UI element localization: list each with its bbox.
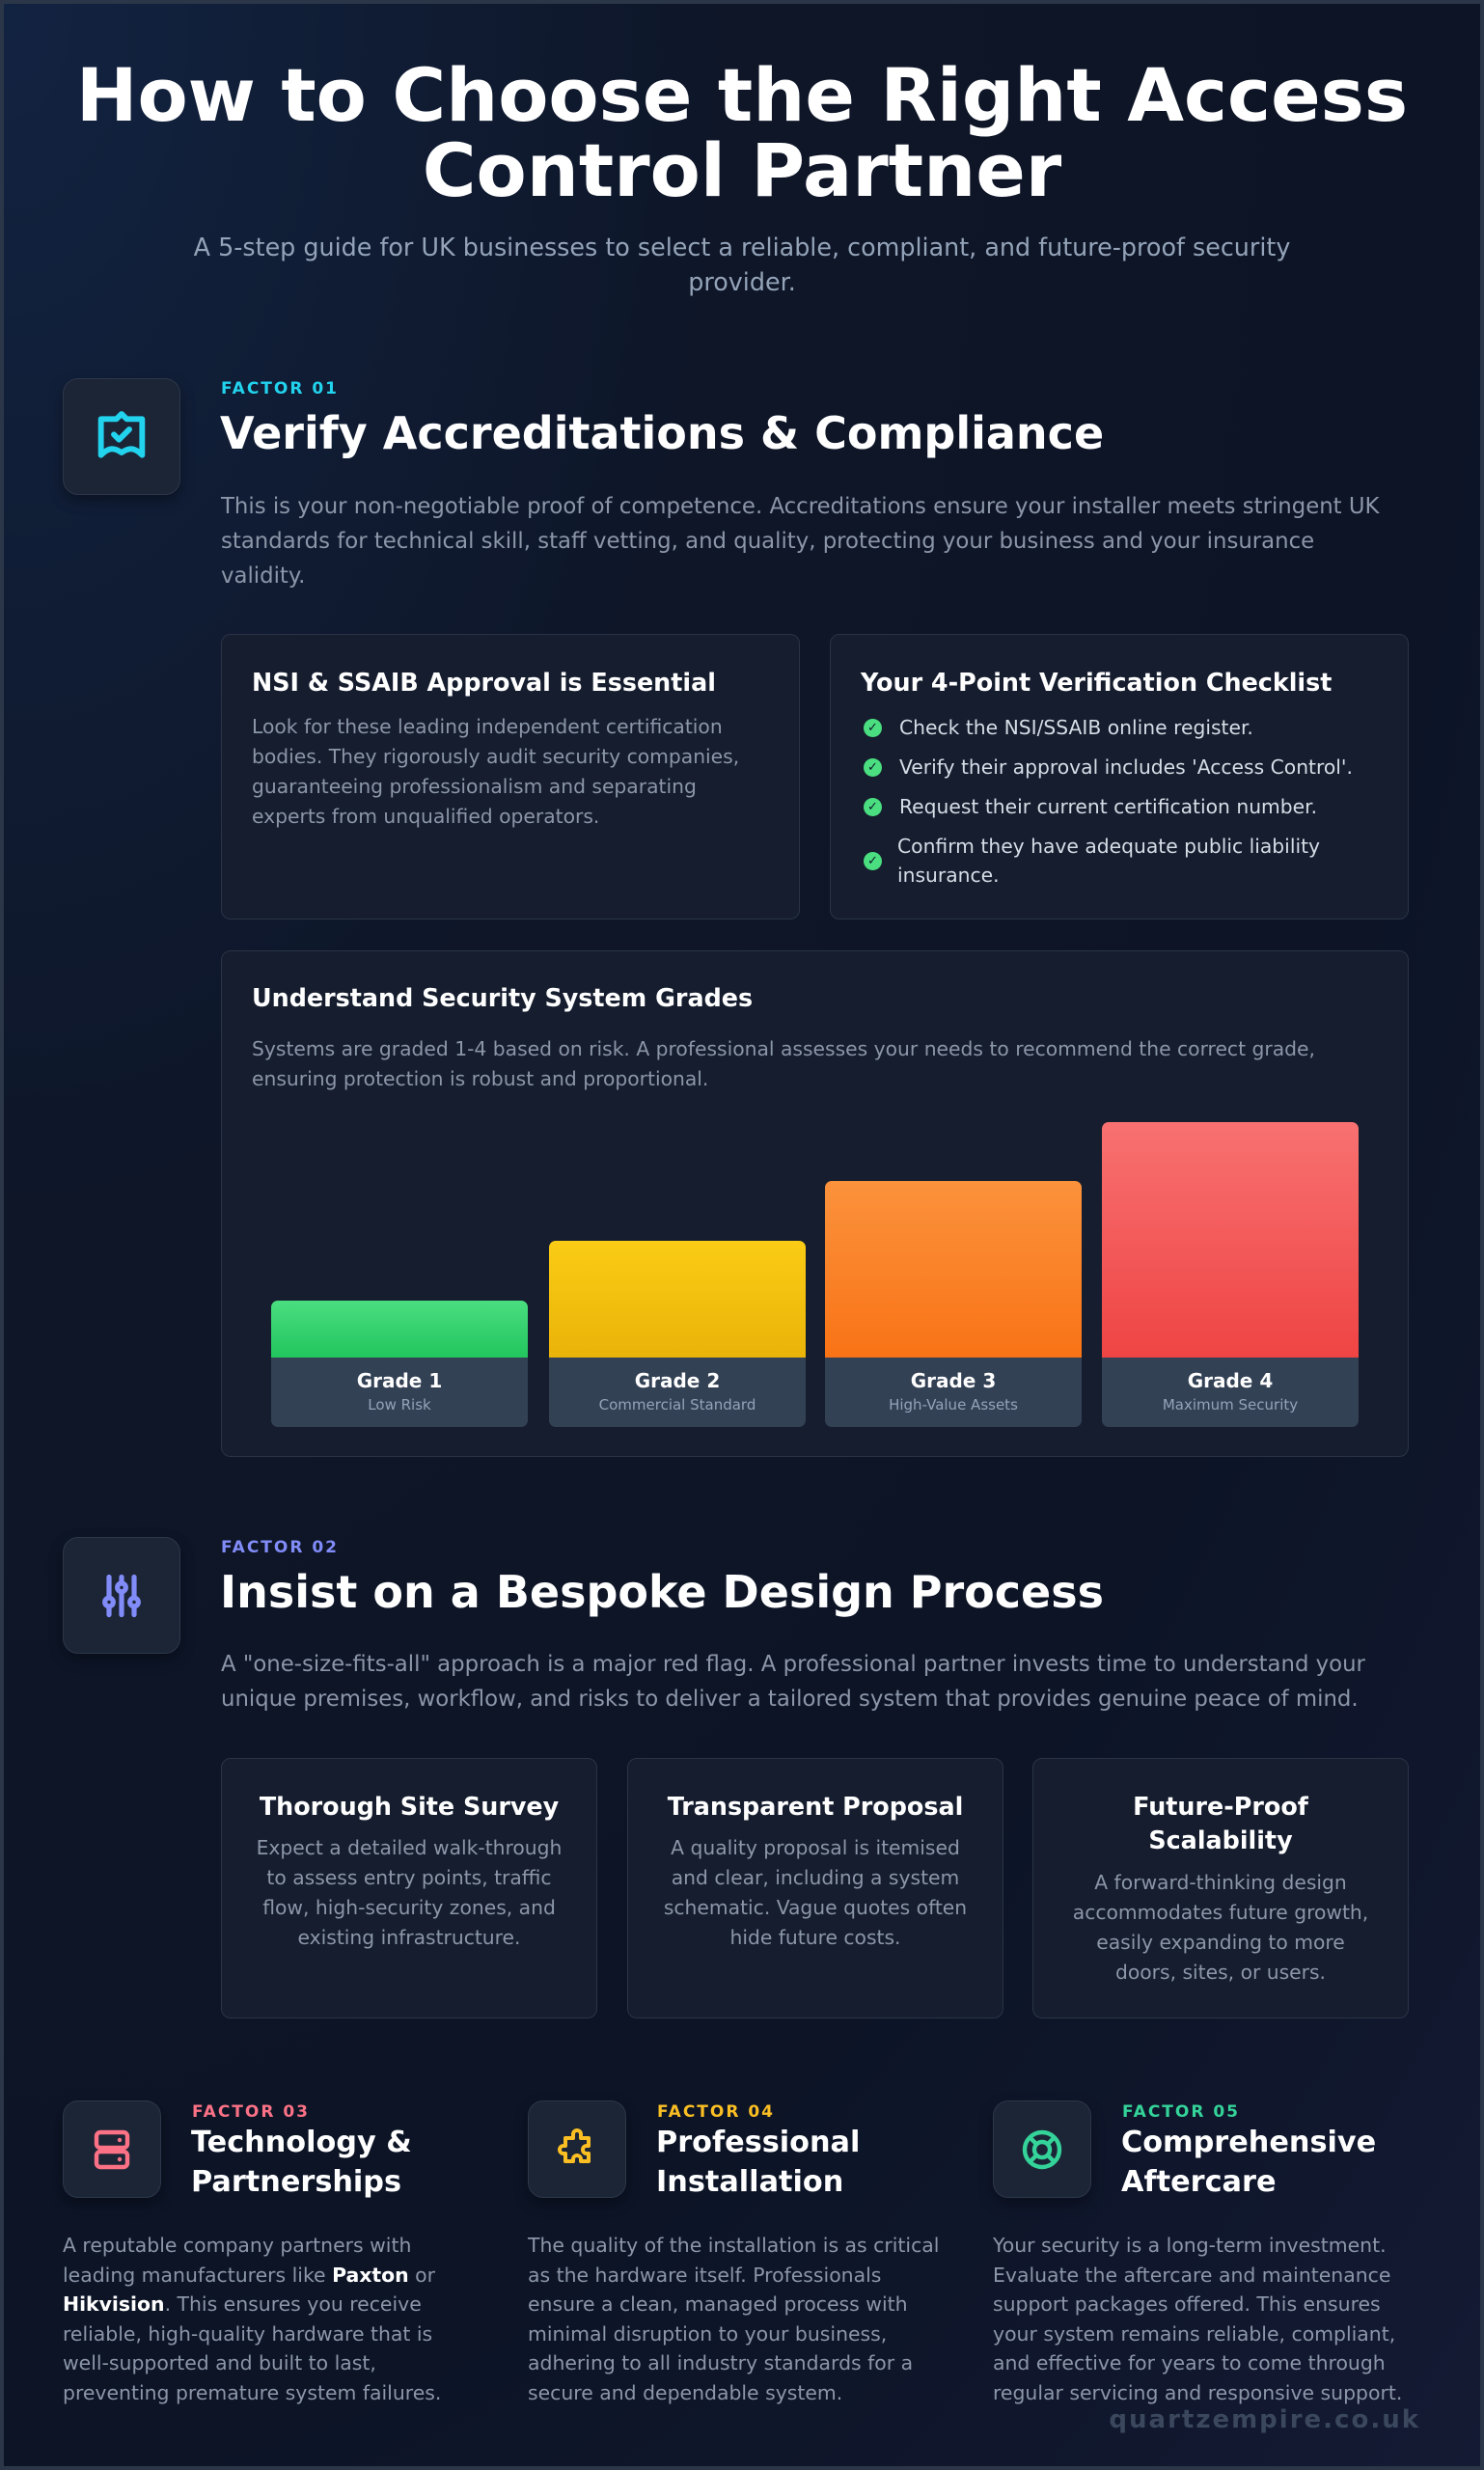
factor 05 block: Comprehensive	[1121, 2126, 1376, 2159]
factor 03 block: FACTOR 03	[192, 2102, 310, 2122]
card: site survey: Expect a detailed walk-through	[257, 1836, 562, 1859]
card: NSI & SSAIB	[221, 634, 800, 919]
paragraph factor 01: validity.	[221, 563, 305, 589]
checklist items: Request their current certification number.	[899, 795, 1317, 818]
card: scalability: Future-Proof	[1133, 1792, 1308, 1821]
subtitle: provider.	[688, 267, 796, 296]
paragraph factor 02: A "one-size-fits-all" approach is a major red flag. A professional partner invests time to understand your	[221, 1652, 1365, 1677]
factor 05 block: Your security is a long-term investment.	[993, 2234, 1387, 2257]
icon: sliders	[63, 1537, 180, 1654]
card: scalability: easily expanding to more	[1096, 1931, 1345, 1954]
factor 03 block	[63, 2100, 441, 2404]
factor 04 block: Installation	[656, 2165, 843, 2199]
factor 04 block: FACTOR 04	[657, 2102, 775, 2122]
factor 03 block: reliable, high-quality hardware that is	[63, 2321, 432, 2345]
checklist items: insurance.	[897, 864, 1000, 887]
card: scalability: accommodates future growth,	[1073, 1901, 1368, 1924]
card: scalability	[1032, 1758, 1409, 2018]
grade labels: Low Risk	[368, 1396, 431, 1413]
factor 05 block: FACTOR 05	[1122, 2102, 1240, 2122]
card: NSI & SSAIB: guaranteeing professionalism and separating	[252, 775, 697, 798]
factor 04 block: as the hardware itself. Professionals	[528, 2264, 881, 2287]
factor 03 block: A reputable company partners with	[63, 2234, 411, 2257]
factor 05 block	[993, 2100, 1402, 2404]
checklist items: Check the NSI/SSAIB online register.	[899, 716, 1253, 739]
checklist items	[864, 716, 1353, 887]
card: proposal: hide future costs.	[729, 1926, 901, 1949]
factor 02 label: FACTOR 02	[221, 1538, 339, 1557]
card: scalability: A forward-thinking design	[1094, 1871, 1347, 1894]
grade labels: Maximum Security	[1163, 1396, 1298, 1413]
grade labels: Grade 1	[357, 1369, 442, 1392]
card: NSI & SSAIB: NSI & SSAIB Approval is Essential	[252, 668, 716, 697]
factor 05 block: Aftercare	[1121, 2165, 1276, 2199]
factor 05 block: regular servicing and responsive support.	[993, 2381, 1402, 2404]
panel: grades chart: Understand Security System Grades	[252, 983, 753, 1012]
card: proposal: and clear, including a system	[672, 1866, 959, 1889]
checklist items: ✓	[867, 854, 878, 868]
factor 05 block: your system remains reliable, compliant,	[993, 2321, 1395, 2345]
card: NSI & SSAIB: Look for these leading independent certification	[252, 715, 723, 738]
heading factor 01: Verify Accreditations & Compliance	[220, 407, 1104, 459]
grade labels: High-Value Assets	[889, 1396, 1018, 1413]
icon: shield check	[63, 378, 180, 495]
factor 04 block: minimal disruption to your business,	[528, 2321, 887, 2345]
factor 05 block: and effective for years to come through	[993, 2351, 1386, 2374]
card: site survey: Thorough Site Survey	[260, 1792, 559, 1821]
card: scalability: doors, sites, or users.	[1115, 1961, 1326, 1984]
factor 04 block: ensure a clean, managed process with	[528, 2292, 908, 2316]
title: Control Partner	[423, 127, 1061, 213]
factor 03 block: Partnerships	[191, 2165, 401, 2199]
grade labels: Grade 3	[911, 1369, 996, 1392]
grade labels: Grade 2	[635, 1369, 720, 1392]
card: NSI & SSAIB: bodies. They rigorously audit security companies,	[252, 745, 739, 768]
card: scalability: Scalability	[1148, 1825, 1293, 1854]
factor 04 block	[527, 2100, 939, 2404]
factor 04 block: adhering to all industry standards for a	[528, 2351, 913, 2374]
checklist items: Confirm they have adequate public liability	[897, 835, 1320, 858]
factor 03 block: preventing premature system failures.	[63, 2381, 441, 2404]
icon: lifebuoy	[993, 2100, 1091, 2198]
factor 04 block: secure and dependable system.	[528, 2381, 842, 2404]
subtitle	[193, 233, 1290, 296]
bar chart	[271, 1122, 1359, 1358]
heading factor 02: Insist on a Bespoke Design Process	[220, 1566, 1104, 1618]
grade labels: Commercial Standard	[599, 1396, 756, 1413]
grade labels: Grade 4	[1188, 1369, 1273, 1392]
factor 05 block: Evaluate the aftercare and maintenance	[993, 2264, 1390, 2287]
subtitle: A 5-step guide for UK businesses to select a reliable, compliant, and future-proof security	[194, 233, 1290, 261]
factor 04 block: Professional	[656, 2126, 860, 2159]
paragraph factor 02	[221, 1652, 1365, 1712]
title	[76, 52, 1408, 213]
icon: server	[63, 2100, 161, 2198]
icon: puzzle	[528, 2100, 626, 2198]
card: NSI & SSAIB: experts from unqualified operators.	[252, 805, 599, 828]
card: checklist	[830, 634, 1409, 919]
card: checklist: Your 4-Point Verification Checklist	[861, 668, 1332, 697]
title: How to Choose the Right Access	[76, 52, 1408, 138]
factor 04 block: The quality of the installation is as critical	[528, 2234, 939, 2257]
paragraph factor 01: standards for technical skill, staff vetting, and quality, protecting your business and your insurance	[221, 529, 1314, 554]
card: site survey: existing infrastructure.	[298, 1926, 520, 1949]
checklist items: ✓	[867, 721, 878, 735]
factor 03 block: Hikvision. This ensures you receive	[63, 2292, 422, 2316]
card: site survey: to assess entry points, traffic	[266, 1866, 552, 1889]
factor 05 block: support packages offered. This ensures	[993, 2292, 1381, 2316]
card: site survey: flow, high-security zones, and	[262, 1896, 556, 1919]
card: proposal: Transparent Proposal	[668, 1792, 963, 1821]
watermark: quartzempire.co.uk	[1109, 2405, 1420, 2434]
grade labels	[271, 1358, 1359, 1427]
factor 03 block: well-supported and built to last,	[63, 2351, 376, 2374]
card: proposal	[627, 1758, 1003, 2018]
checklist items: ✓	[867, 760, 878, 775]
paragraph factor 01	[220, 494, 1380, 589]
card: proposal: schematic. Vague quotes often	[664, 1896, 967, 1919]
panel: grades chart	[221, 950, 1409, 1457]
checklist items: Verify their approval includes 'Access Control'.	[899, 755, 1353, 779]
panel: grades chart: ensuring protection is robust and proportional.	[252, 1067, 708, 1090]
panel: grades chart: Systems are graded 1-4 based on risk. A professional assesses your needs to recommend the correct grade,	[252, 1037, 1315, 1060]
factor 03 block: Technology &	[191, 2126, 412, 2159]
paragraph factor 01: This is your non-negotiable proof of competence. Accreditations ensure your installer meets stringent UK	[221, 494, 1380, 519]
card: site survey	[221, 1758, 597, 2018]
card: proposal: A quality proposal is itemised	[671, 1836, 960, 1859]
factor 03 block: leading manufacturers like Paxton or	[63, 2264, 435, 2287]
paragraph factor 02: unique premises, workflow, and risks to deliver a tailored system that provides genuine peace of mind.	[221, 1687, 1359, 1712]
factor 01 label: FACTOR 01	[221, 379, 339, 398]
checklist items: ✓	[867, 800, 878, 814]
